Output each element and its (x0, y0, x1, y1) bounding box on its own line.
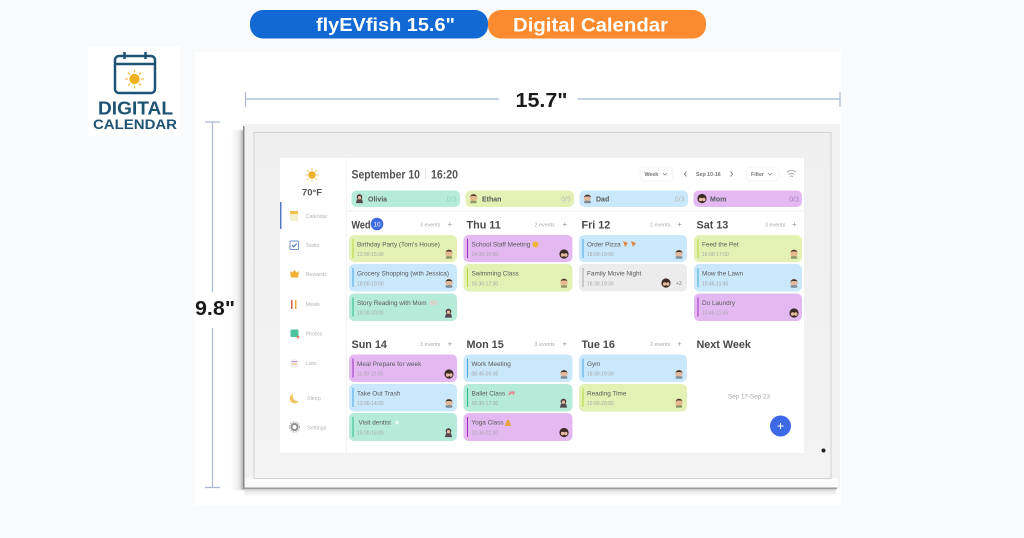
column: Wed (349, 218, 457, 321)
card: Feed the Pet: Feed the Pet (702, 242, 739, 248)
column: Tue: Tue 16 (582, 339, 615, 351)
card: Yoga Class: Yoga Class (472, 420, 504, 426)
card: Take Out Trash: Take Out Trash (357, 390, 401, 398)
column: Wed: 3 events (420, 222, 441, 228)
height dimension arrow (195, 122, 235, 488)
card: Feed the Pet: 16:00-17:00 (702, 252, 729, 258)
column: Thu: 2 events (534, 222, 555, 228)
date and time header: September 10 (352, 170, 420, 182)
height dimension arrow: 9.8" (195, 298, 235, 320)
column: Sat (694, 220, 802, 321)
column: Sun: Sun 14 (352, 339, 387, 351)
weather widget: 70°F (302, 188, 322, 198)
card: Grocery Shopping (349, 264, 457, 292)
column: Wed: Wed (352, 220, 370, 232)
card: Swimming Class: Swimming Class (472, 270, 519, 278)
column: Mon (464, 339, 572, 441)
column: Next Week: Next Week (696, 339, 752, 351)
nav: Calendar (290, 211, 328, 221)
logo: digital calendar: DIGITAL (98, 98, 173, 118)
chip: Mom: Mom (710, 196, 726, 204)
card: Reading Time (579, 384, 687, 412)
card: Feed the Pet (694, 235, 802, 262)
nav: Tasks: Tasks (306, 243, 320, 249)
chip: Ethan: Ethan (482, 196, 501, 204)
nav: Tasks (290, 241, 320, 250)
nav: Photos: Photos (306, 332, 323, 338)
column: Next Week: Sep 17-Sep 23 (728, 394, 771, 400)
card: Order Pizza: Order Pizza (587, 242, 621, 248)
column: Sun (349, 339, 457, 441)
column: Fri: + (677, 220, 682, 229)
toolbar controls (640, 167, 796, 181)
column: Wed: + (448, 220, 452, 229)
logo: digital calendar (88, 46, 180, 136)
card: Grocery Shopping: Grocery Shopping (with Jessica) (357, 270, 449, 278)
column: Sun: 3 events (420, 342, 441, 348)
card: Do Laundry: Do Laundry (702, 300, 736, 307)
column: Sat: + (792, 220, 797, 229)
card: Order Pizza (579, 235, 687, 262)
icon: wifi (787, 170, 796, 176)
card: School Staff Meeting (464, 235, 572, 262)
nav: Settings (290, 422, 327, 432)
card: Work Meeting (464, 354, 572, 382)
card: Gym: 18:30-19:30 (587, 372, 614, 378)
card: Family Movie Night (579, 264, 687, 292)
card: Ballet Class: 16:30-17:30 (472, 401, 498, 407)
card: Yoga Class (464, 413, 572, 441)
product photo white panel (195, 52, 841, 505)
column: Thu: Thu 11 (466, 220, 501, 232)
column: Mon: Mon 15 (466, 339, 504, 351)
card: Story Reading: 19:00-20:00 (357, 310, 384, 316)
today badge: 10 (373, 221, 381, 228)
title pill: Digital Calendar: Digital Calendar (513, 14, 668, 36)
sidebar navigation (280, 202, 328, 432)
card: Meal Prepare: Meal Prepare for week (357, 361, 422, 368)
chip: Olivia: Olivia (368, 196, 387, 204)
card: Birthday Party (349, 235, 457, 262)
nav: Rewards: Rewards (306, 272, 327, 278)
card: Work Meeting: 08:45-09:45 (472, 372, 498, 378)
nav: Settings: Settings (307, 426, 327, 432)
width dimension arrow: 15.7" (516, 90, 568, 112)
logo: digital calendar: CALENDAR (93, 117, 177, 132)
column: Fri: 2 events (650, 222, 671, 228)
card: Reading Time: 19:00-20:00 (587, 401, 614, 407)
card: Do Laundry: 10:45-11:45 (702, 310, 729, 316)
toolbar controls: Filter (751, 172, 764, 178)
card: Ballet Class (464, 384, 572, 412)
toolbar controls: Sep 10-16 (696, 172, 721, 178)
column: Mon: + (562, 340, 568, 348)
card: Swimming Class (464, 264, 572, 292)
card: Mow the Lawn: Mow the Lawn (702, 270, 744, 278)
chip: Olivia (352, 190, 460, 207)
nav: Meals (291, 300, 320, 309)
card: Family Movie Night: Family Movie Night (587, 270, 642, 278)
app screen (280, 158, 804, 453)
chip: Dad (580, 190, 688, 207)
column: Mon: 3 events (534, 342, 555, 348)
chip: Ethan: 0/5 (561, 196, 571, 204)
card: Story Reading (349, 294, 457, 321)
card: Meal Prepare (349, 354, 457, 382)
title pill: flyEVfish 15.6" (250, 10, 488, 38)
chip: Mom (694, 190, 802, 207)
chip: Ethan (466, 190, 574, 207)
card: Gym: Gym (587, 361, 600, 368)
nav: Calendar: Calendar (306, 214, 328, 220)
icon: calendar with sun (115, 52, 155, 93)
power dot (822, 448, 826, 452)
card: Yoga Class: 20:30-21:30 (472, 430, 498, 436)
card: Ballet Class: Ballet Class (472, 390, 505, 398)
chip: Olivia: 0/3 (447, 196, 457, 204)
column: Next Week (696, 339, 771, 400)
nav: Lists (290, 360, 317, 368)
card: Birthday Party: Birthday Party (Tom's House) (357, 242, 440, 248)
chip: Dad: 0/3 (675, 196, 685, 204)
card: Family Movie Night: +3 (676, 281, 682, 287)
column: Tue: 2 events (650, 342, 671, 348)
column: Sat: 3 events (765, 222, 786, 228)
column: Thu (464, 220, 572, 292)
card: School Staff Meeting: School Staff Meeting (472, 242, 531, 248)
card: Family Movie Night: 18:30-19:30 (587, 282, 614, 288)
calendar device frame (231, 124, 840, 496)
family member chips (352, 190, 802, 207)
add event button (770, 416, 791, 436)
title pill: flyEVfish 15.6": flyEVfish 15.6" (316, 14, 455, 35)
width dimension arrow (246, 90, 840, 112)
card: Grocery Shopping: 18:00-19:00 (357, 282, 384, 288)
date and time header (352, 169, 458, 182)
nav: Lists: Lists (306, 361, 317, 367)
card: Mow the Lawn (694, 264, 802, 292)
card: Gym (579, 354, 687, 382)
card: Take Out Trash (349, 384, 457, 412)
card: Swimming Class: 16:30-17:30 (472, 282, 498, 288)
card: Story Reading: Story Reading with Mom (357, 300, 427, 307)
card: Reading Time: Reading Time (587, 390, 627, 398)
card: Visit dentist: 15:00-16:00 (357, 430, 384, 436)
nav: Photos (290, 330, 323, 338)
title pill: Digital Calendar (488, 10, 706, 38)
column: Sun: + (448, 340, 452, 348)
card: Mow the Lawn: 10:45-11:45 (702, 282, 729, 288)
weather widget (302, 168, 322, 198)
card: Do Laundry (694, 294, 802, 321)
card: Birthday Party: 13:00-15:00 (357, 252, 384, 258)
toolbar controls: Week (644, 172, 658, 178)
column: Tue: + (677, 340, 682, 348)
column: Fri (579, 220, 687, 292)
column: Fri: Fri 12 (582, 220, 610, 232)
chip: Dad: Dad (596, 196, 609, 204)
chip: Mom: 0/3 (789, 196, 799, 204)
date and time header: 16:20 (431, 170, 458, 182)
nav: Sleep (290, 394, 321, 403)
column: Tue (579, 339, 687, 412)
nav: Sleep: Sleep (307, 396, 321, 402)
card: Visit dentist (349, 413, 457, 441)
card: School Staff Meeting: 14:00-15:00 (472, 252, 498, 258)
column: Thu: + (562, 220, 568, 229)
card: Order Pizza: 18:00-19:00 (587, 252, 614, 258)
card: Meal Prepare: 11:00-12:00 (357, 372, 384, 378)
column: Sat: Sat 13 (696, 220, 728, 232)
nav: Rewards (290, 270, 327, 278)
card: Take Out Trash: 13:00-14:00 (357, 401, 384, 407)
card: Work Meeting: Work Meeting (472, 361, 511, 368)
nav: Meals: Meals (306, 302, 320, 308)
card: Visit dentist: Visit dentist (358, 420, 391, 426)
